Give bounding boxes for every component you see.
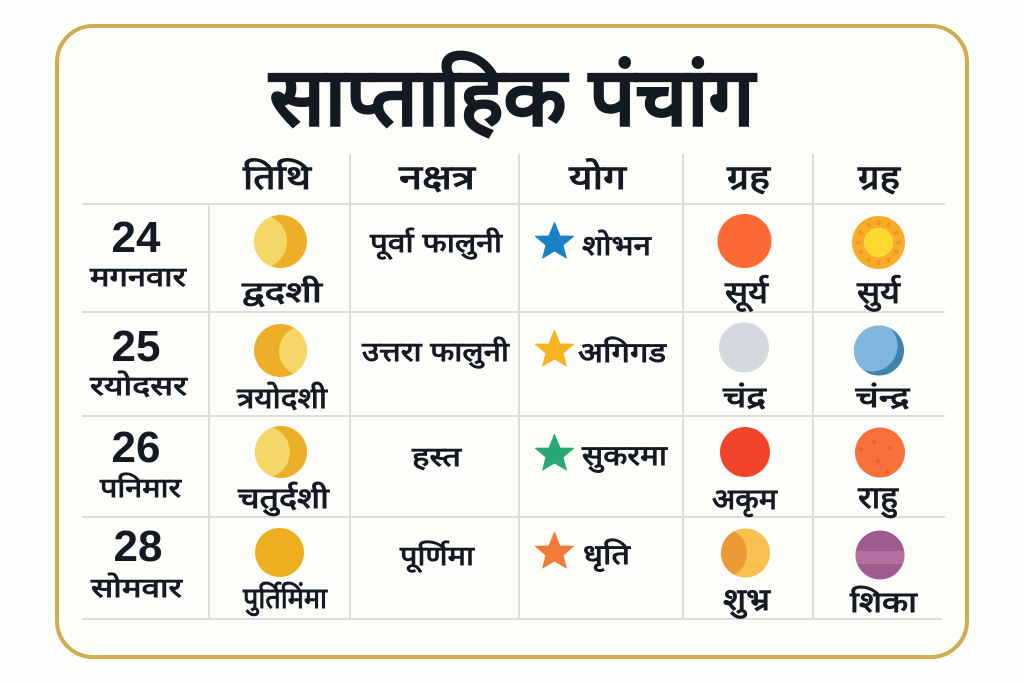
icon: orange planet [718,214,772,268]
icon: blue planet [854,326,904,376]
row 26: चतुर्दशी [237,481,331,517]
row 24: सूर्य [724,274,769,313]
row 26 [99,422,905,519]
row 24: सुर्य [856,274,901,312]
icon: red planet [720,427,770,477]
row 24 [89,212,905,313]
table header [242,157,902,197]
row 25: 25 [112,322,160,371]
icon: tithi moon [254,215,307,268]
row 24: 24 [112,213,161,262]
icon: orange star [536,532,574,568]
icon: orange planet [855,428,905,478]
row 24: द्वदशी [241,275,324,309]
row 28 [90,522,919,619]
icon: green star [536,434,574,470]
row 26: अकृम [712,484,779,518]
row 25: अगिगड [578,336,667,368]
row 25: चंद्र [722,382,768,414]
row 28: शुभ्र [723,582,771,619]
table header: तिथि [242,157,312,197]
table header: नक्षत्र [398,159,476,197]
icon: yellow star [536,330,574,366]
row 26: राहु [857,480,900,519]
icon: purple planet [856,530,904,580]
icon: grey planet [719,322,769,372]
row 25: रयोदसर [89,370,188,401]
row 25: त्रयोदशी [236,381,329,415]
row 25 [89,320,912,415]
row 28: 28 [114,522,162,571]
row 24: मगनवार [89,262,187,292]
row 28: पूर्णिमा [399,540,475,574]
row 26: सुकरमा [581,440,669,473]
row 25: उत्तरा फालुनी [361,336,510,369]
icon: blue star [536,222,574,258]
row 25: चंन्द्र [854,382,912,414]
row 26: हस्त [411,442,463,472]
icon: full moon [255,528,304,577]
row 26: 26 [112,423,160,472]
icon: half moon [721,528,770,578]
table header: ग्रह [726,159,772,197]
row 24: शोभन [582,229,653,261]
row 28: सोमवार [90,572,183,603]
table header: योग [568,157,628,197]
icon: tithi moon [255,426,307,478]
row 28: धृति [583,538,631,572]
row 28: शिका [849,585,919,619]
row 28: पुर्तिमिंमा [242,581,328,617]
row 26: पनिमार [99,472,182,503]
icon: tithi moon [254,324,307,377]
icon: sun [852,216,905,269]
row 24: पूर्वा फालुनी [369,227,503,261]
table header: ग्रह [857,159,902,197]
title: साप्ताहिक पंचांग [267,51,757,143]
